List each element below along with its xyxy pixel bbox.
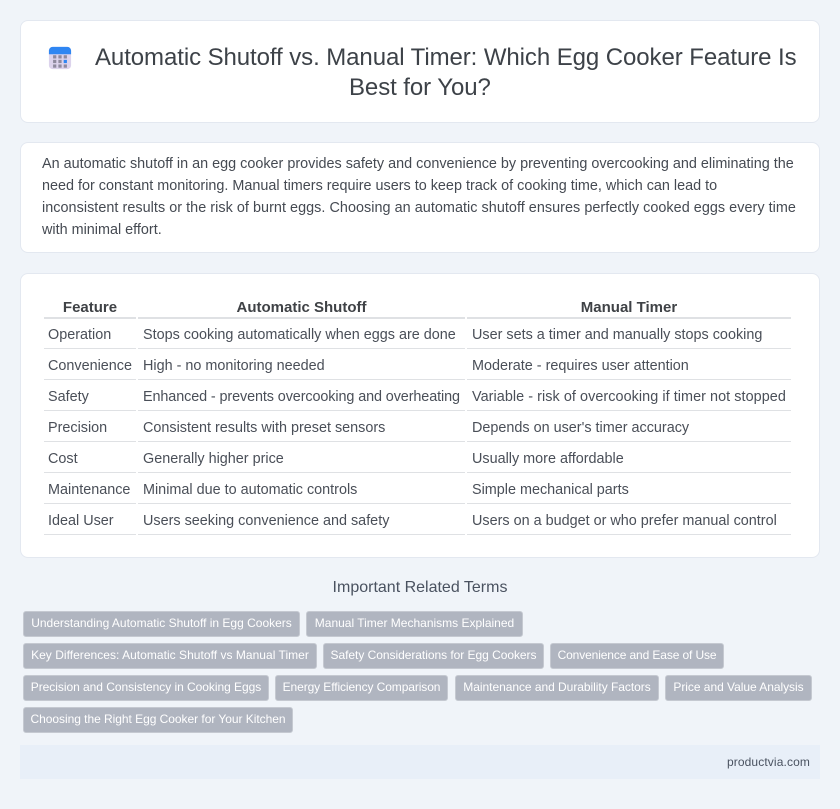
comparison table: Stops cooking automatically when eggs are done: [143, 327, 456, 343]
tag: [23, 611, 300, 637]
comparison table: Generally higher price: [143, 451, 284, 467]
tag: [323, 643, 544, 669]
tag: Convenience and Ease of Use: [558, 648, 716, 662]
comparison table: Usually more affordable: [472, 451, 624, 467]
row: cost: Cost: [48, 451, 78, 467]
tag: [665, 675, 812, 701]
header: manual timer: Manual Timer: [581, 299, 677, 316]
panel: comparison table: [20, 273, 820, 558]
row: ideal user: Ideal User: [48, 513, 114, 529]
tag: [306, 611, 523, 637]
intro paragraph: An automatic shutoff in an egg cooker provides safety and convenience by preventing overcooking and eliminating the: [42, 156, 794, 172]
row: maintenance: Maintenance: [48, 482, 130, 498]
heading: important related terms: Important Related Terms: [333, 579, 507, 596]
panel: intro text: [20, 142, 820, 253]
tag: Precision and Consistency in Cooking Eggs: [31, 680, 261, 694]
comparison table: Simple mechanical parts: [472, 482, 629, 498]
related term tags: [23, 611, 812, 733]
tag: Maintenance and Durability Factors: [463, 680, 651, 694]
row: operation: Operation: [48, 327, 111, 343]
title: Automatic Shutoff vs. Manual Timer: Which Egg Cooker Feature Is: [95, 44, 796, 71]
comparison table: Users seeking convenience and safety: [143, 513, 389, 529]
intro paragraph: inconsistent results or the risk of burnt eggs. Choosing an automatic shutoff ensures perfectly cooked eggs every time: [42, 200, 796, 216]
tag: [23, 643, 317, 669]
row: safety: Safety: [48, 389, 89, 405]
title: Best for You?: [349, 74, 491, 101]
intro paragraph: with minimal effort.: [42, 222, 162, 238]
title: [95, 44, 796, 101]
comparison table: Enhanced - prevents overcooking and overheating: [143, 389, 460, 405]
tag: Key Differences: Automatic Shutoff vs Manual Timer: [31, 648, 309, 662]
comparison table: User sets a timer and manually stops cooking: [472, 327, 762, 343]
intro paragraph: need for constant monitoring. Manual timers require users to keep track of cooking time, which can lead to: [42, 178, 717, 194]
header: automatic shutoff: Automatic Shutoff: [236, 299, 366, 316]
tag: [23, 675, 269, 701]
tag: Price and Value Analysis: [673, 680, 804, 694]
row: precision: Precision: [48, 420, 107, 436]
tag: Understanding Automatic Shutoff in Egg Cookers: [31, 616, 292, 630]
tag: Energy Efficiency Comparison: [283, 680, 440, 694]
comparison table: Depends on user's timer accuracy: [472, 420, 689, 436]
row: convenience: Convenience: [48, 358, 132, 374]
icon: calendar: [48, 46, 72, 70]
tag: [275, 675, 448, 701]
footer bar: [20, 745, 820, 779]
tag: Manual Timer Mechanisms Explained: [315, 616, 514, 630]
comparison table: Consistent results with preset sensors: [143, 420, 385, 436]
comparison table: Moderate - requires user attention: [472, 358, 689, 374]
footer source: productvia.com: [727, 755, 810, 769]
intro paragraph: [42, 156, 796, 238]
tag: [23, 707, 293, 733]
comparison table: Users on a budget or who prefer manual control: [472, 513, 777, 529]
panel: title card: [20, 20, 820, 123]
tag: [455, 675, 659, 701]
tag: Choosing the Right Egg Cooker for Your Kitchen: [30, 712, 286, 726]
comparison table: Minimal due to automatic controls: [143, 482, 357, 498]
comparison table: [44, 299, 791, 535]
tag: Safety Considerations for Egg Cookers: [331, 648, 536, 662]
comparison table: High - no monitoring needed: [143, 358, 325, 374]
comparison table: Variable - risk of overcooking if timer not stopped: [472, 389, 786, 405]
table header: Feature: [63, 299, 117, 316]
tag: [550, 643, 724, 669]
